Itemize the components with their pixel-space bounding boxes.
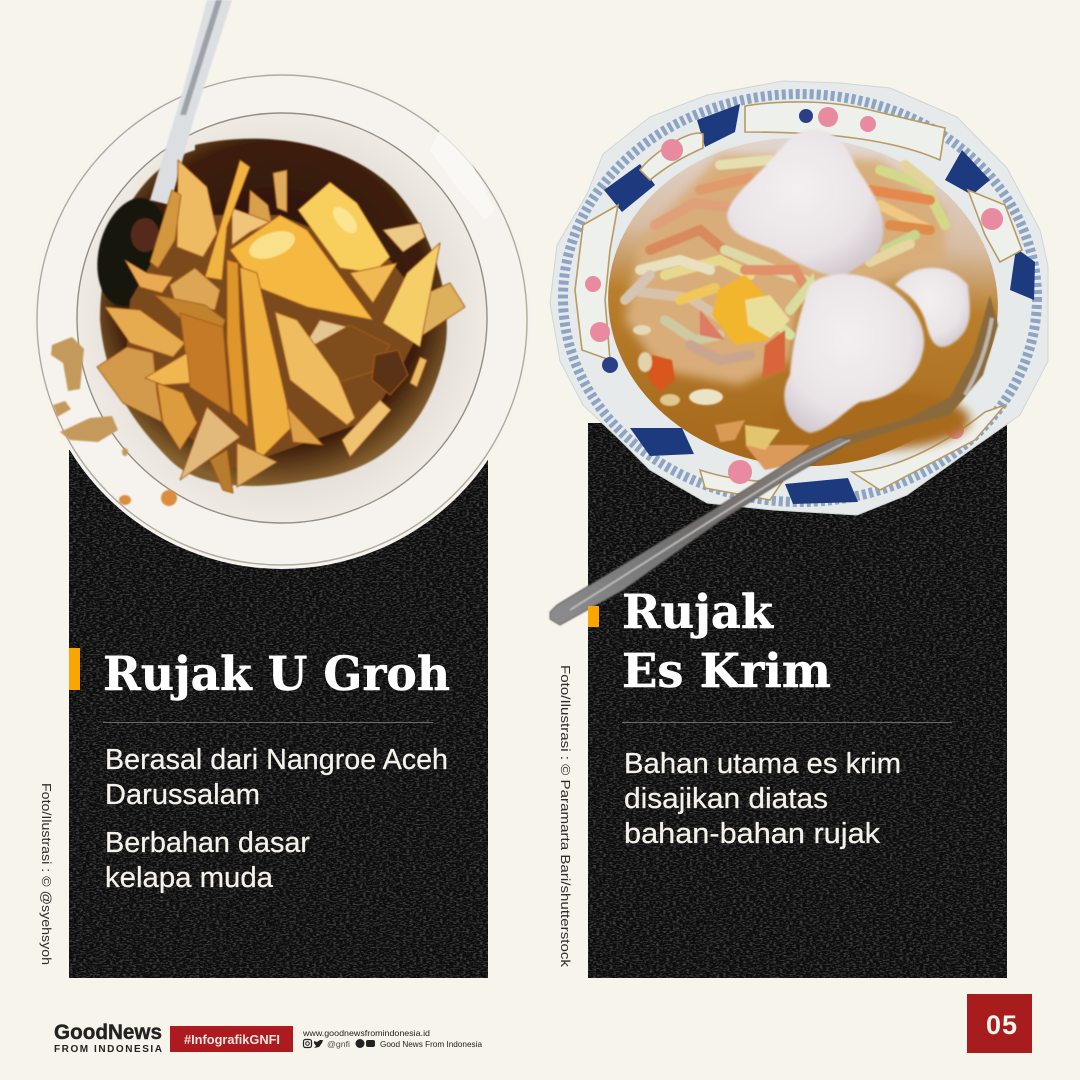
navy panels [604, 104, 1035, 504]
page number badge [967, 994, 1032, 1053]
cartouches [575, 102, 1022, 500]
salad pile [625, 160, 945, 360]
footer links and social icons [302, 1028, 482, 1049]
footer links and social icons: @gnfi [327, 1039, 350, 1049]
mango and carrot chunks [633, 275, 810, 470]
text block: Rujak Es Krim description: bahan-bahan rujak [624, 818, 881, 850]
text block: Rujak Es Krim description [624, 748, 901, 850]
text block: Rujak U Groh description: Berbahan dasar [105, 827, 310, 859]
text block: Rujak U Groh description [105, 744, 448, 894]
footer logo: GoodNews From Indonesia: FROM INDONESIA [54, 1044, 162, 1055]
glaze highlights [245, 203, 361, 264]
accent bar: right title [588, 606, 599, 627]
broth well [597, 125, 1009, 479]
heading: Rujak Es Krim: Rujak [622, 585, 774, 640]
right spoon [550, 295, 998, 625]
text block: Rujak U Groh description: Berasal dari Nangroe Aceh [105, 744, 448, 776]
food pieces [97, 160, 465, 493]
footer logo: GoodNews From Indonesia: GoodNews [54, 1021, 162, 1044]
hashtag badge [170, 1026, 293, 1052]
hashtag badge: #InfografikGNFI [184, 1033, 280, 1047]
photo credit: left: Foto/Ilustrasi : © @syehsyoh [39, 783, 54, 965]
ice cream scoops [727, 130, 970, 433]
plate rim [550, 81, 1048, 515]
sauce pool [100, 139, 447, 486]
panel: right dark slate card [588, 423, 1007, 978]
footer links and social icons: www.goodnewsfromindonesia.id [302, 1028, 430, 1038]
text block: Rujak Es Krim description: Bahan utama es krim [624, 748, 901, 780]
panel: left dark slate card [69, 450, 488, 978]
rim flowers [585, 107, 1003, 484]
salad mass [625, 155, 945, 385]
accent bar: left title [69, 648, 80, 690]
text block: Rujak Es Krim description: disajikan diatas [624, 783, 828, 815]
photo: bowl of rujak u groh [33, 0, 531, 569]
photo credit: right: Foto/Ilustrasi : © Paramarta Bari/shutterstock [558, 665, 573, 968]
heading: Rujak Es Krim [622, 585, 831, 699]
text block: Rujak U Groh description: Darussalam [105, 779, 260, 811]
spill drips [51, 337, 177, 506]
page number badge: 05 [986, 1010, 1018, 1040]
footer links and social icons: Good News From Indonesia [380, 1039, 482, 1049]
heading: Rujak Es Krim: Es Krim [622, 644, 831, 699]
text block: Rujak U Groh description: kelapa muda [105, 862, 274, 894]
footer logo: GoodNews From Indonesia [54, 1021, 162, 1055]
photo: plate of rujak es krim [550, 81, 1048, 625]
heading: Rujak U Groh: Rujak U Groh [103, 647, 450, 702]
spoon [87, 0, 232, 313]
